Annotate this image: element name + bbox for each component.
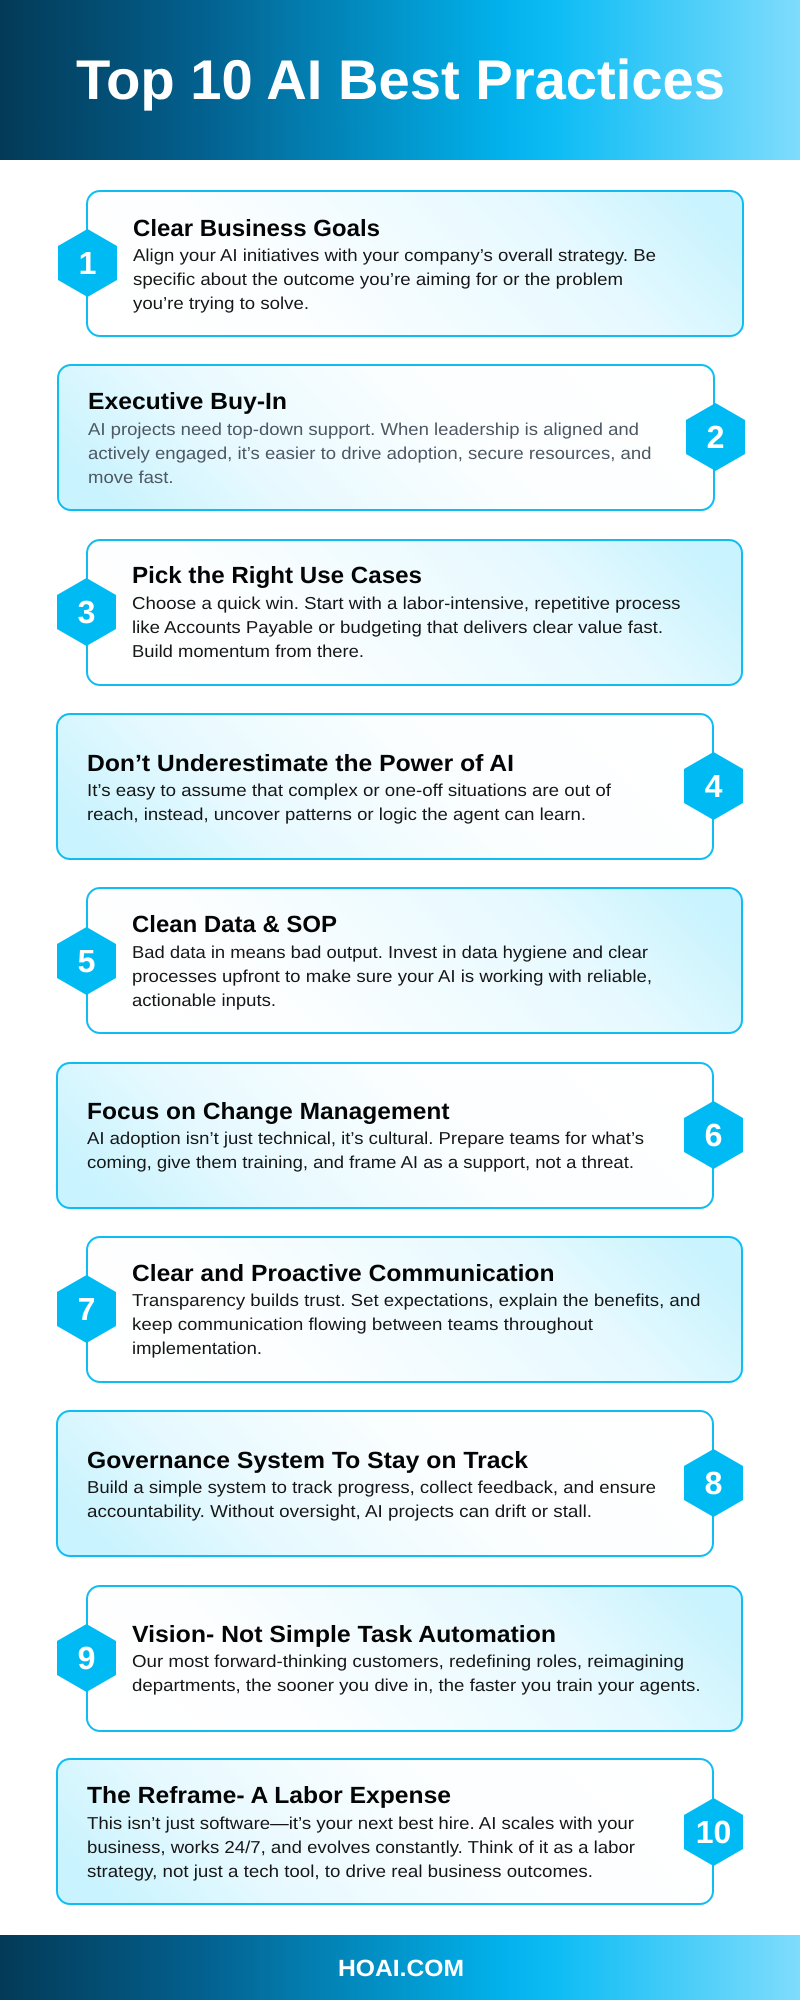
heading: Executive Buy-In <box>88 388 287 414</box>
body text <box>132 1651 700 1695</box>
icon: hexagon number 2 <box>686 403 745 471</box>
heading: Vision- Not Simple Task Automation <box>132 1621 556 1647</box>
icon: hexagon number 3 <box>57 578 116 646</box>
panel: 9 Vision- Not Simple Task Automation <box>57 1586 742 1731</box>
title: Top 10 AI Best Practices <box>76 48 725 111</box>
body text: AI projects need top-down support. When leadership is aligned and <box>88 419 639 439</box>
body text <box>132 942 652 1010</box>
body text: Bad data in means bad output. Invest in data hygiene and clear <box>132 942 648 962</box>
panel: 4 Don't Underestimate the Power of AI <box>57 714 743 859</box>
icon: hexagon number 9 <box>57 1624 116 1692</box>
body text: reach, instead, uncover patterns or logic the agent can learn. <box>87 804 586 824</box>
icon: hexagon number 6 <box>684 1101 743 1169</box>
icon: hexagon number 4 <box>684 752 743 820</box>
body text: move fast. <box>88 467 174 487</box>
body text <box>133 245 656 313</box>
body text: AI adoption isn’t just technical, it’s cultural. Prepare teams for what’s <box>87 1128 644 1148</box>
icon: hexagon number 1 <box>58 229 117 297</box>
body text <box>87 1813 635 1881</box>
icon: hexagon number 7 <box>57 1275 116 1343</box>
icon: hexagon number 5: 5 <box>78 943 95 979</box>
body text: processes upfront to make sure your AI is working with reliable, <box>132 966 652 986</box>
header banner <box>0 0 800 160</box>
panel: 5 Clean Data & SOP <box>57 888 742 1033</box>
icon: hexagon number 6: 6 <box>705 1117 722 1153</box>
icon: hexagon number 7: 7 <box>78 1291 95 1327</box>
body text: This isn’t just software—it’s your next best hire. AI scales with your <box>87 1813 634 1833</box>
body text: Build a simple system to track progress, collect feedback, and ensure <box>87 1477 656 1497</box>
body text: Build momentum from there. <box>132 641 364 661</box>
icon: hexagon number 4: 4 <box>705 768 723 804</box>
body text: like Accounts Payable or budgeting that delivers clear value fast. <box>132 617 663 637</box>
heading: Don’t Underestimate the Power of AI <box>87 750 514 776</box>
heading: Focus on Change Management <box>87 1098 450 1124</box>
body text <box>87 1128 644 1172</box>
icon: hexagon number 8 <box>684 1449 743 1517</box>
icon: hexagon number 9: 9 <box>78 1640 95 1676</box>
icon: hexagon number 5 <box>57 927 116 995</box>
body text: accountability. Without oversight, AI projects can drift or stall. <box>87 1501 592 1521</box>
panel: 10 The Reframe- A Labor Expense <box>57 1759 743 1904</box>
body text: business, works 24/7, and evolves constantly. Think of it as a labor <box>87 1837 635 1857</box>
heading: Clean Data & SOP <box>132 911 337 937</box>
body text: actionable inputs. <box>132 990 276 1010</box>
body text: specific about the outcome you’re aiming for or the problem <box>133 269 623 289</box>
body text <box>132 593 681 661</box>
panel: 6 Focus on Change Management <box>57 1063 743 1208</box>
body text <box>87 780 611 824</box>
body text: implementation. <box>132 1338 262 1358</box>
panel: 3 Pick the Right Use Cases <box>57 540 742 685</box>
footer banner <box>0 1935 800 2000</box>
body text <box>132 1290 700 1358</box>
panel: 7 Clear and Proactive Communication <box>57 1237 742 1382</box>
heading: Clear and Proactive Communication <box>132 1260 554 1286</box>
body text: keep communication flowing between teams throughout <box>132 1314 593 1334</box>
body text: coming, give them training, and frame AI as a support, not a threat. <box>87 1152 634 1172</box>
heading: Governance System To Stay on Track <box>87 1447 529 1473</box>
footer text: HOAI.COM <box>338 1955 464 1981</box>
panel: 1 Clear Business Goals <box>58 191 743 336</box>
heading: The Reframe- A Labor Expense <box>87 1782 451 1808</box>
panel: 2 Executive Buy-In <box>58 365 745 510</box>
icon: hexagon number 2: 2 <box>707 419 724 455</box>
body text: Transparency builds trust. Set expectations, explain the benefits, and <box>132 1290 700 1310</box>
body text: Our most forward-thinking customers, redefining roles, reimagining <box>132 1651 684 1671</box>
body text: Choose a quick win. Start with a labor-intensive, repetitive process <box>132 593 681 613</box>
icon: hexagon number 10: 10 <box>696 1814 731 1850</box>
body text: Align your AI initiatives with your company’s overall strategy. Be <box>133 245 656 265</box>
body text: actively engaged, it’s easier to drive adoption, secure resources, and <box>88 443 652 463</box>
heading: Clear Business Goals <box>133 215 380 241</box>
body text: departments, the sooner you dive in, the faster you train your agents. <box>132 1675 700 1695</box>
heading: Pick the Right Use Cases <box>132 562 422 588</box>
body text <box>88 419 652 487</box>
body text: you’re trying to solve. <box>133 293 309 313</box>
icon: hexagon number 1: 1 <box>79 245 96 281</box>
body text <box>87 1477 656 1521</box>
icon: hexagon number 3: 3 <box>78 594 95 630</box>
panel: 8 Governance System To Stay on Track <box>57 1411 743 1556</box>
body text: strategy, not just a tech tool, to drive real business outcomes. <box>87 1861 593 1881</box>
icon: hexagon number 10 <box>684 1798 743 1866</box>
icon: hexagon number 8: 8 <box>705 1465 722 1501</box>
body text: It’s easy to assume that complex or one-off situations are out of <box>87 780 611 800</box>
